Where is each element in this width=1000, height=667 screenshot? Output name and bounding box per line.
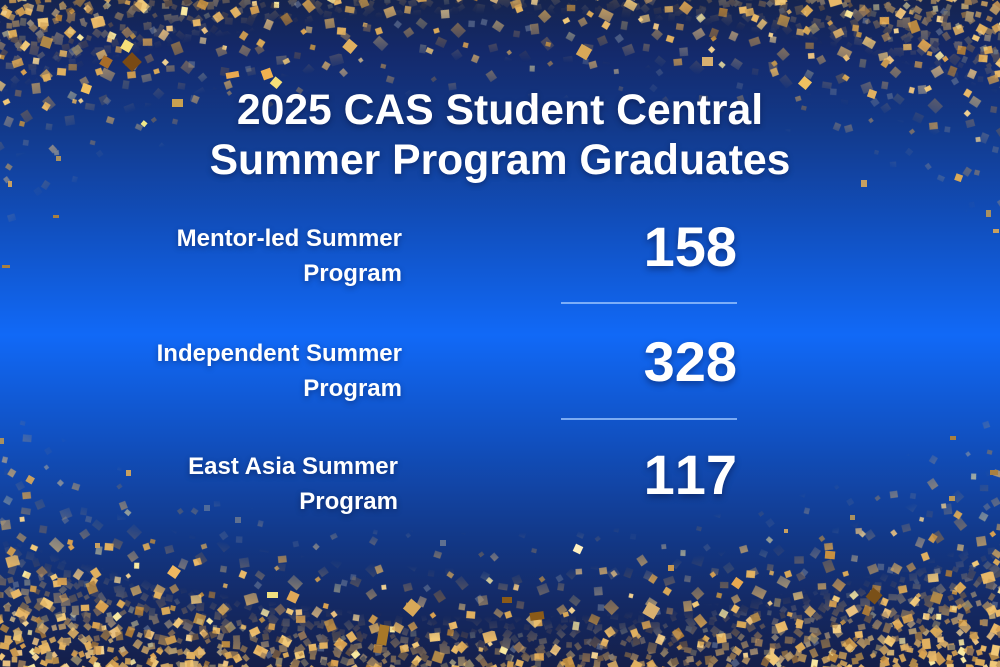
label: East Asia Summer Program: East Asia Summer: [188, 453, 398, 480]
label: Independent Summer Program: Independent Summer: [157, 340, 402, 367]
number: 328: 328: [644, 330, 737, 393]
divider 2: [561, 418, 737, 420]
label: Independent Summer Program: [155, 340, 404, 406]
label: East Asia Summer Program: Program: [299, 488, 398, 515]
label: Mentor-led Summer Program: [175, 225, 404, 290]
number: 117: 117: [644, 443, 737, 506]
number: 158: 158: [644, 215, 737, 278]
label: Independent Summer Program: Program: [303, 375, 402, 402]
divider 1: [561, 302, 737, 304]
label: Mentor-led Summer Program: Mentor-led Summer: [177, 225, 402, 252]
title: Summer Program Graduates: [210, 136, 790, 184]
label: Mentor-led Summer Program: Program: [303, 260, 402, 287]
label: East Asia Summer Program: [187, 453, 399, 518]
title: [210, 86, 791, 188]
title: 2025 CAS Student Central: [237, 86, 763, 134]
